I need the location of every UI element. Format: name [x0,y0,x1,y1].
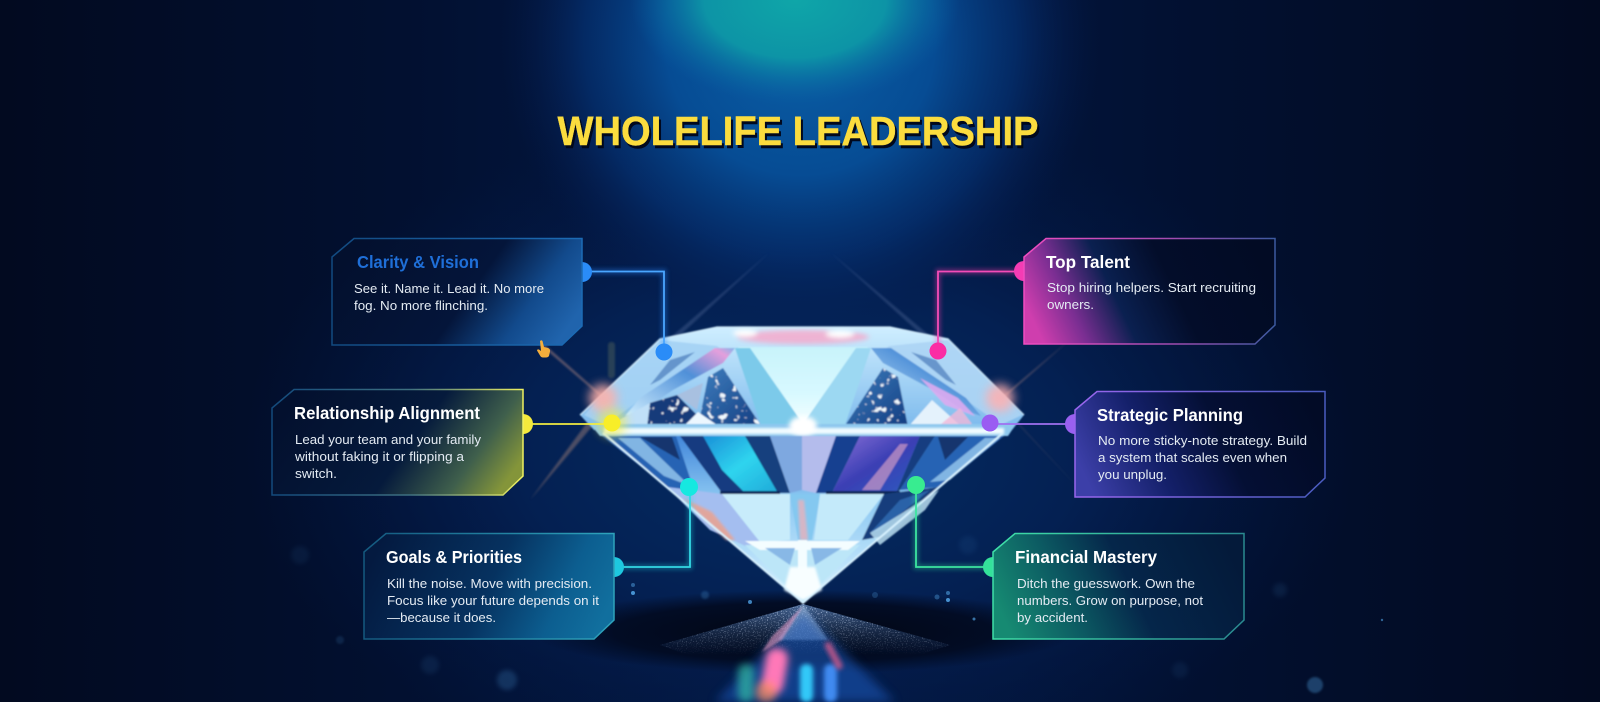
panel: Clarity & Vision [332,238,592,345]
outer crown shading [584,340,725,425]
pavilion body [598,430,1008,603]
body text: Lead your team and your family [295,432,481,447]
lower pavilion facets [667,487,760,548]
sparkle right [986,384,1014,412]
connector: Financial Mastery [907,476,993,567]
floor and reflection [533,590,1073,702]
table rim glow [733,330,869,344]
girdle band [590,424,1016,436]
heading: Financial Mastery [1015,547,1157,567]
body text: Focus like your future depends on it [387,593,599,608]
body text [354,281,544,313]
heading: Top Talent [1046,252,1130,272]
body text: numbers. Grow on purpose, not [1017,593,1203,608]
body text: a system that scales even when [1098,450,1287,465]
crown body [580,327,1024,430]
bottom culet [745,545,860,602]
body text: —because it does. [387,610,496,625]
connector: Strategic Planning [982,414,1075,432]
heading: Relationship Alignment [294,403,480,423]
panel: Top Talent [1014,238,1275,344]
body text [1017,576,1203,625]
body text [1047,280,1256,312]
panel: Strategic Planning [1065,392,1325,497]
body text [294,432,481,481]
light rays [530,252,1085,500]
title: WHOLELIFE LEADERSHIP [558,108,1038,154]
connector: Goals & Priorities [614,478,698,567]
body text: you unplug. [1098,467,1167,482]
connector: Relationship Alignment [523,409,626,437]
outline highlights [603,433,1003,603]
body text: fog. No more flinching. [354,298,488,313]
body text: owners. [1047,297,1094,312]
body text: Ditch the guesswork. Own the [1017,576,1195,591]
body text [1098,433,1307,482]
body text: without faking it or flipping a [294,449,465,464]
left crown facets [698,368,762,427]
panel: Financial Mastery [983,534,1244,639]
panel: Goals & Priorities [364,534,624,639]
connector: Clarity & Vision [582,272,672,360]
icon: pointing hand [537,340,550,358]
body text: by accident. [1017,610,1088,625]
body text: switch. [295,466,337,481]
body text: No more sticky-note strategy. Build [1098,433,1307,448]
diamond [580,327,1024,603]
sparkle left [589,384,617,412]
upper pavilion facets [602,436,695,493]
heading: Strategic Planning [1097,405,1243,425]
body text: Stop hiring helpers. Start recruiting [1047,280,1256,295]
right crown facets [844,368,908,427]
heading: Goals & Priorities [386,547,522,567]
body text: Kill the noise. Move with precision. [387,576,592,591]
heading: Clarity & Vision [357,252,479,272]
connector: Top Talent [930,272,1024,360]
panel: Relationship Alignment [272,390,533,495]
bokeh particles [291,536,1383,693]
title: WHOLELIFE LEADERSHIP [560,111,1040,157]
body text: See it. Name it. Lead it. No more [354,281,544,296]
body text [387,576,599,625]
crown centre table [738,347,868,426]
